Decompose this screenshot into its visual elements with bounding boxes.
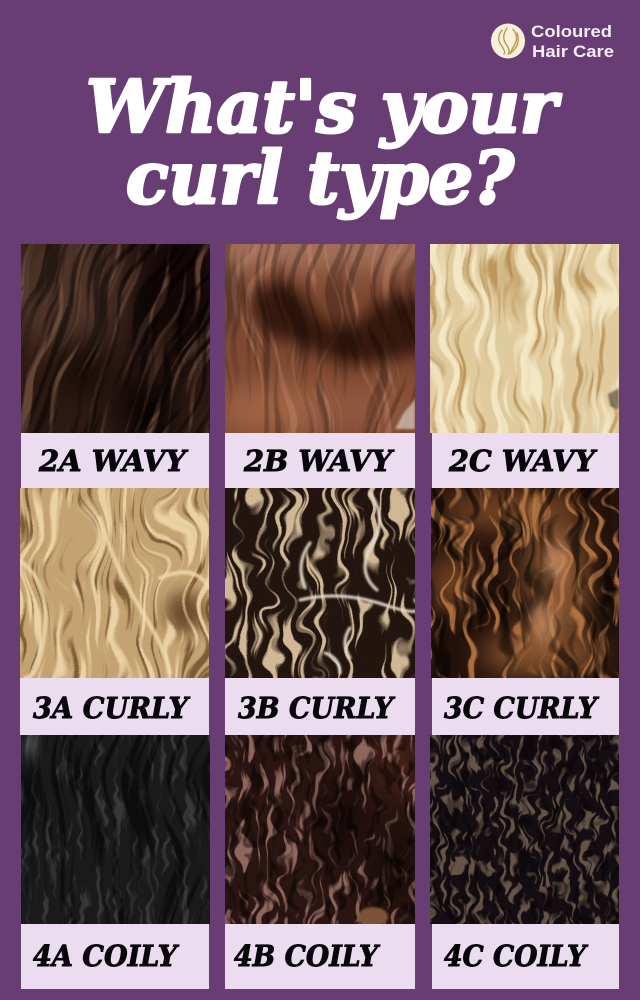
panel: 3B curly — [165, 428, 475, 738]
logo wordmark — [531, 22, 614, 61]
panel: 4A coily — [0, 705, 241, 989]
logo wordmark: Coloured — [531, 22, 612, 41]
panel: 4B coily — [185, 695, 455, 989]
label: 3B CURLY — [225, 678, 415, 735]
label: 4A COILY: 4A COILY — [33, 939, 180, 973]
label: 3C CURLY — [432, 678, 619, 735]
label: 2C WAVY: 2C WAVY — [448, 444, 598, 478]
label: 2A WAVY: 2A WAVY — [38, 444, 189, 478]
panel: 3C curly — [371, 428, 640, 738]
label: 3B CURLY: 3B CURLY — [238, 691, 396, 725]
photo: auburn brown wavy hair — [225, 244, 415, 433]
photo: black crimped hair — [21, 735, 210, 924]
photo: dark curly hair with blonde highlights — [225, 488, 415, 678]
label: 2B WAVY: 2B WAVY — [243, 444, 395, 478]
panel: 2C wavy — [370, 184, 640, 494]
icon: hair silhouette — [491, 24, 525, 58]
photo: blonde wavy hair — [430, 244, 619, 433]
label: 3A CURLY — [20, 678, 209, 735]
logo — [491, 22, 614, 61]
label: 4C COILY — [432, 924, 619, 989]
title — [86, 64, 562, 220]
photo: dark brown ringlet hair — [225, 735, 415, 924]
label: 3C CURLY: 3C CURLY — [444, 691, 600, 725]
label: 2C WAVY — [432, 433, 619, 488]
photo: dark brown wavy hair — [21, 244, 210, 433]
label: 4C COILY: 4C COILY — [444, 939, 589, 973]
label: 2A WAVY — [21, 433, 209, 488]
title: curl type? — [126, 135, 515, 220]
panel: 4C coily — [390, 695, 640, 989]
photo: tight dark coils — [430, 735, 619, 924]
label: 2B WAVY — [225, 433, 415, 488]
logo wordmark: Hair Care — [532, 42, 614, 61]
label: 4A COILY — [21, 924, 209, 989]
photo: dark auburn curly hair — [431, 488, 619, 678]
panel: 3A curly — [0, 428, 270, 738]
label: 4B COILY — [225, 924, 415, 989]
label: 3A CURLY: 3A CURLY — [33, 691, 191, 725]
label: 4B COILY: 4B COILY — [234, 939, 381, 973]
panel: 2A wavy — [0, 128, 327, 551]
title: What's your — [86, 64, 562, 149]
photo: golden blonde curly hair — [20, 488, 209, 678]
panel: 2B wavy — [165, 184, 475, 494]
